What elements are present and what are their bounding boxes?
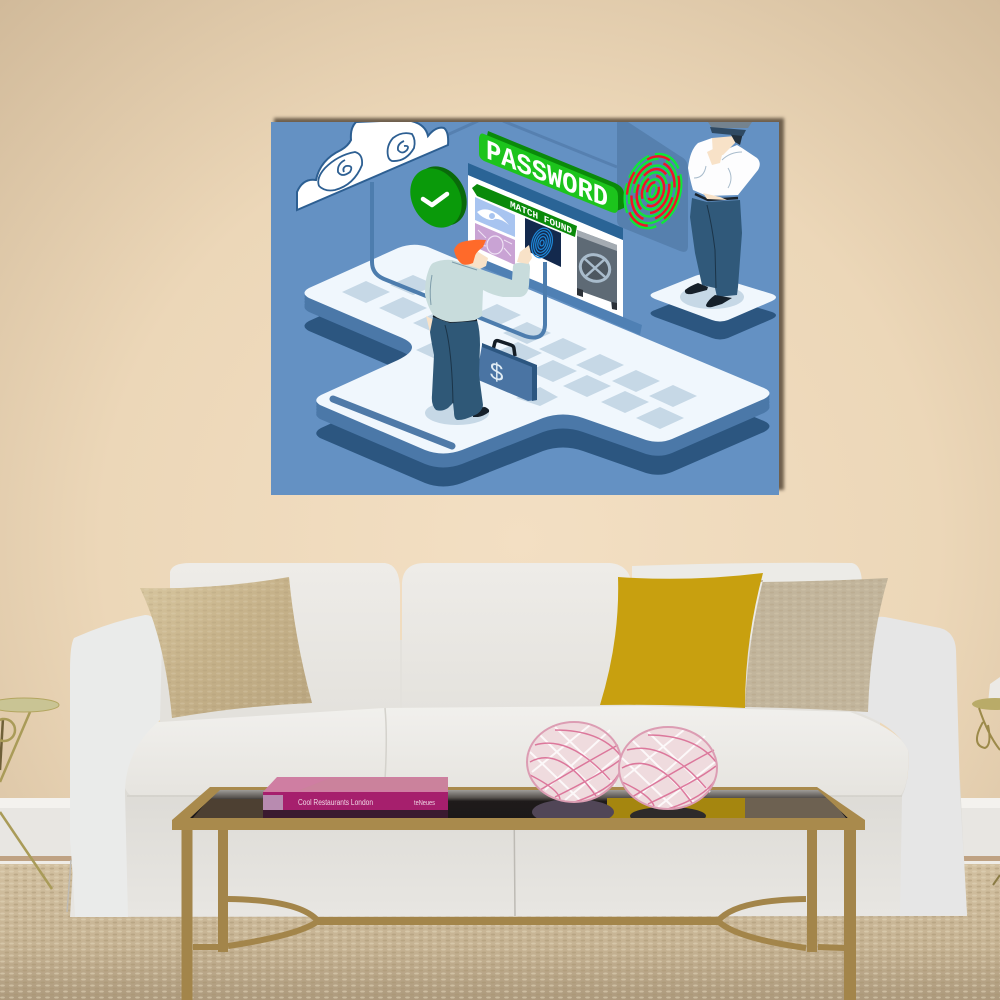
sofa seat cushions (123, 706, 908, 796)
book: teNeues (414, 800, 435, 807)
fingerprint (616, 147, 690, 235)
guard trouser crease (707, 205, 716, 288)
cloud swirl right (388, 133, 415, 161)
right beige pillow (745, 578, 888, 712)
book (263, 777, 448, 810)
sofa back cushions (170, 563, 862, 712)
man trouser crease (445, 325, 453, 403)
man shirt fold (430, 262, 477, 305)
man left hand (426, 316, 434, 332)
carpet (0, 864, 1000, 1000)
coffee table (172, 787, 865, 1000)
man shirt (425, 260, 530, 322)
canvas shadow (274, 118, 784, 490)
man shoe (473, 407, 489, 417)
man floor shadow (425, 401, 489, 425)
guard shirt (688, 138, 760, 196)
guard hair (730, 133, 743, 145)
fingerprint tile (525, 218, 561, 267)
sofa back filler (160, 640, 880, 735)
man hand (517, 245, 532, 264)
man belt (433, 316, 477, 322)
left beige pillow (140, 577, 312, 718)
safe tile (576, 230, 617, 310)
face scan tile (475, 223, 515, 265)
small platform shadow (650, 292, 776, 340)
guard shirt folds (694, 152, 742, 188)
guard cap (708, 122, 752, 136)
briefcase: $ (490, 357, 504, 388)
cloud (297, 120, 448, 210)
glass reflections (193, 798, 846, 818)
screen white panel (468, 175, 623, 317)
platform base shadow (304, 278, 770, 486)
password sign: PASSWORD (486, 135, 608, 216)
sofa skirt (70, 780, 967, 917)
baseboard (0, 798, 1000, 865)
wall lines (447, 121, 617, 167)
platform side (304, 248, 770, 468)
screen shadow band (468, 253, 642, 335)
skirt seam (67, 796, 515, 916)
right side table with books (972, 677, 1000, 885)
platform top (304, 245, 770, 454)
man at the screen (425, 240, 532, 425)
table frame (172, 787, 865, 830)
guard shoe left (685, 283, 708, 294)
guard belt (695, 194, 738, 200)
pink glass vases (527, 722, 717, 809)
book: Cool Restaurants London (298, 798, 373, 807)
security guard (685, 122, 760, 307)
cloud swirl left (318, 152, 362, 190)
main keyboard platform (304, 245, 770, 486)
briefcase (476, 341, 537, 401)
table lower structure (187, 830, 850, 1000)
fingerprint backing panel (617, 118, 688, 252)
right vase (619, 727, 717, 809)
small platform under guard (650, 274, 776, 340)
green check badge (400, 157, 477, 237)
man face (466, 250, 488, 270)
guard shoe right (706, 295, 732, 307)
guard floor shadow (680, 285, 744, 309)
cable from cloud to fingerprint tile (372, 182, 545, 338)
eye tile (475, 197, 515, 237)
left vase (527, 722, 621, 802)
small platform top (650, 274, 776, 322)
space bar slot (333, 399, 452, 446)
sofa left arm (70, 615, 162, 917)
sofa right arm (856, 617, 967, 916)
canvas artwork (271, 122, 779, 495)
guard trousers (690, 198, 742, 297)
match found ribbon (472, 184, 577, 237)
man trousers (430, 317, 483, 420)
match found ribbon: MATCH FOUND (510, 199, 572, 237)
man hair (454, 240, 486, 265)
guard hand (707, 148, 722, 165)
left side table (0, 698, 59, 889)
wall background (0, 0, 1000, 800)
guard belly (703, 193, 727, 200)
login screen (468, 163, 623, 317)
yellow pillow (600, 573, 763, 708)
screen title bar (468, 163, 623, 240)
keyboard keys (342, 275, 697, 429)
guard face (712, 136, 735, 156)
glass top (188, 789, 848, 818)
sofa (67, 563, 967, 917)
